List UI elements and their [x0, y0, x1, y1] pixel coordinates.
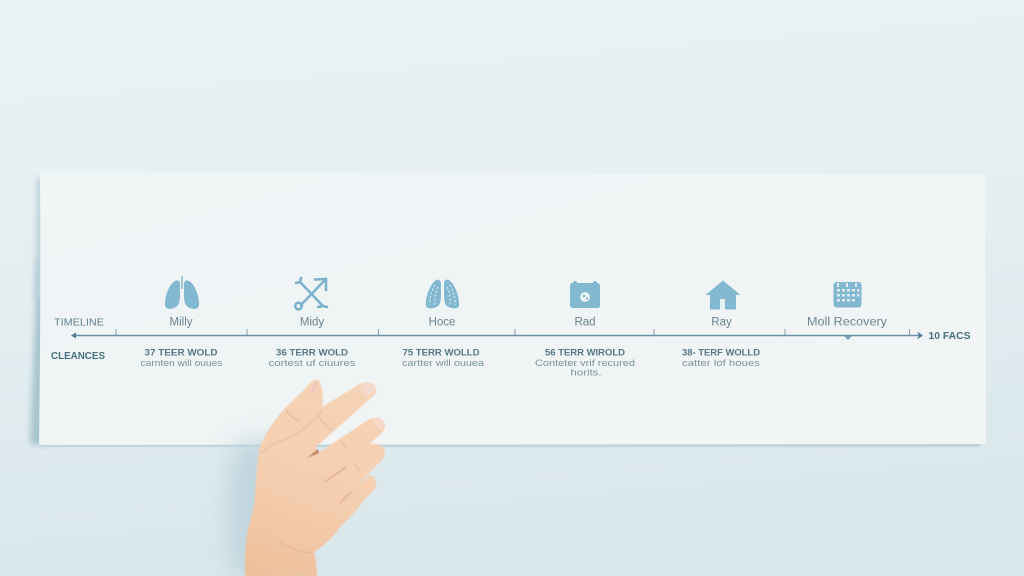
icon: textured lungs [426, 280, 459, 308]
text block: stage 4: Conteter vrif recured [535, 358, 635, 369]
text block: stage 3 [402, 348, 485, 369]
text block: stage 2 [268, 348, 356, 369]
text block: stage 5: catter lof houes [682, 358, 760, 369]
stage label: ray: Ray [711, 316, 732, 328]
label: clearances: CLEANCES [51, 350, 105, 362]
icon: house [706, 280, 740, 310]
text block: stage 4: 56 TERR WIROLD [545, 348, 625, 358]
stage label: moll recovery: Moll Recovery [807, 316, 887, 328]
text block: stage 4: horits. [570, 368, 602, 378]
panel: paper sheet [39, 172, 986, 445]
text block: stage 3: 75 TERR WOLLD [402, 348, 480, 358]
stage label: midy: Midy [300, 316, 324, 328]
text block: stage 1 [140, 348, 223, 369]
text block: stage 1: 37 TEER WOLD [144, 348, 218, 358]
hand silhouette [245, 380, 385, 576]
label: 10 facs: 10 FACS [928, 330, 970, 342]
icon: calendar grid [834, 282, 862, 308]
text block: stage 1: carnten will ouues [140, 358, 223, 369]
text block: stage 5 [682, 348, 760, 369]
text block: stage 3: cartter will ouuea [402, 358, 485, 369]
text block: stage 5: 38- TERF WOLLD [682, 348, 760, 358]
paper shadow [30, 178, 980, 447]
timeline axis [71, 329, 923, 340]
stage label: hoce: Hoce [429, 316, 455, 328]
icon: crossed tools [295, 278, 327, 309]
fingernails [308, 380, 319, 395]
stage label: rad: Rad [574, 316, 596, 328]
creases [261, 410, 361, 553]
text block: stage 2: 36 TERR WOLD [276, 348, 348, 358]
finger gap [307, 449, 319, 458]
label: timeline: TIMELINE [54, 316, 104, 328]
hand [245, 380, 385, 576]
stage label: milly: Milly [170, 316, 193, 328]
icon: lungs [165, 276, 199, 309]
text block: stage 2: cortest uf ciuures [268, 358, 356, 369]
icon: calendar badge [570, 281, 600, 308]
hand shadow [227, 440, 300, 576]
text block: stage 4 [535, 348, 635, 378]
